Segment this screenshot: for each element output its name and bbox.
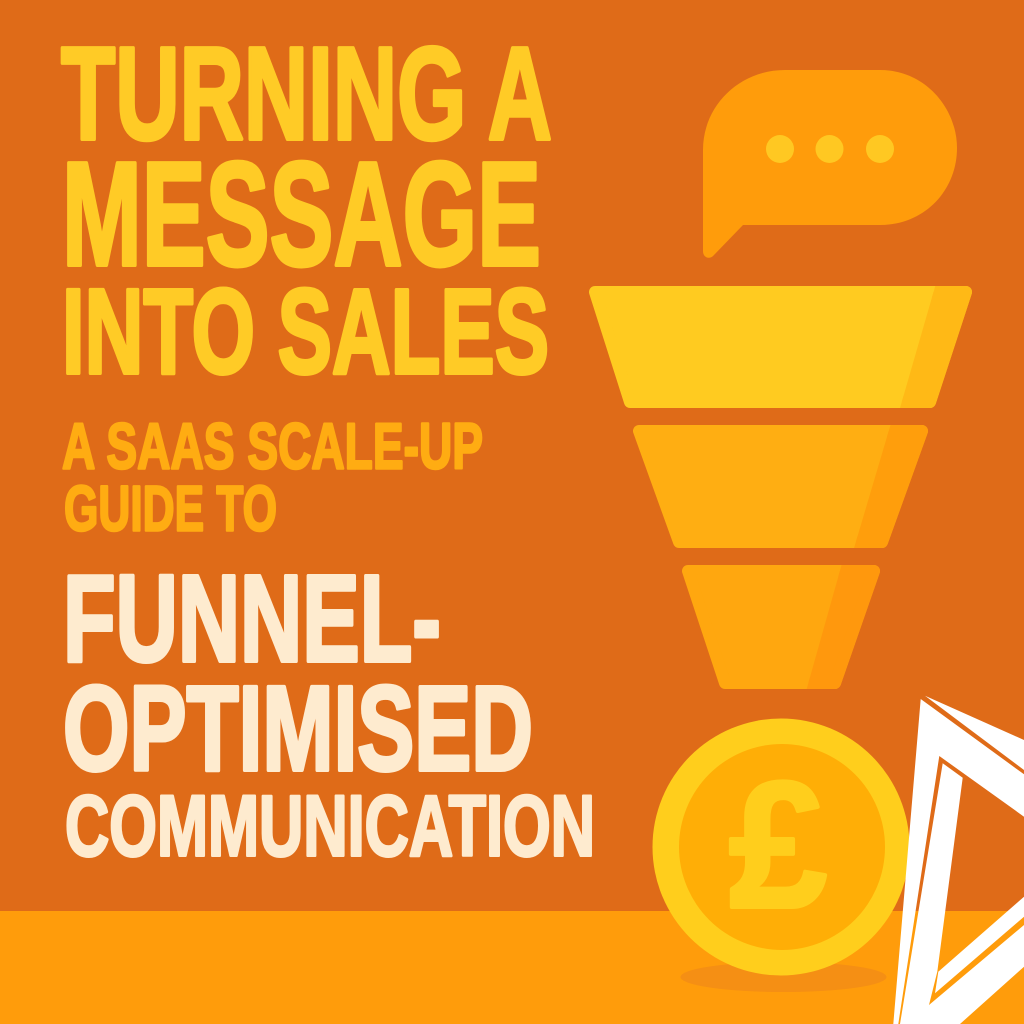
icon: pound coin: [652, 718, 910, 976]
main topic heading: OPTIMISED: [63, 660, 533, 796]
title: [61, 20, 552, 399]
funnel: top tier: [595, 292, 966, 402]
white triangular frame: [893, 696, 1024, 1024]
funnel: bottom tier: [688, 571, 874, 683]
main topic heading: COMMUNICATION: [65, 778, 595, 874]
main topic heading: [63, 551, 595, 874]
title: TURNING A: [61, 20, 552, 167]
subtitle: GUIDE TO: [64, 472, 277, 544]
title: MESSAGE: [62, 132, 541, 297]
ground band: [0, 911, 1024, 1024]
title: INTO SALES: [62, 263, 549, 399]
subtitle: [62, 410, 483, 544]
main topic heading: FUNNEL-: [63, 551, 441, 688]
funnel: middle tier: [639, 431, 922, 542]
icon: pound coin: £: [729, 745, 827, 946]
icon: speech bubble: [703, 70, 957, 258]
coin shadow: [680, 962, 886, 992]
subtitle: A SAAS SCALE-UP: [62, 410, 483, 482]
